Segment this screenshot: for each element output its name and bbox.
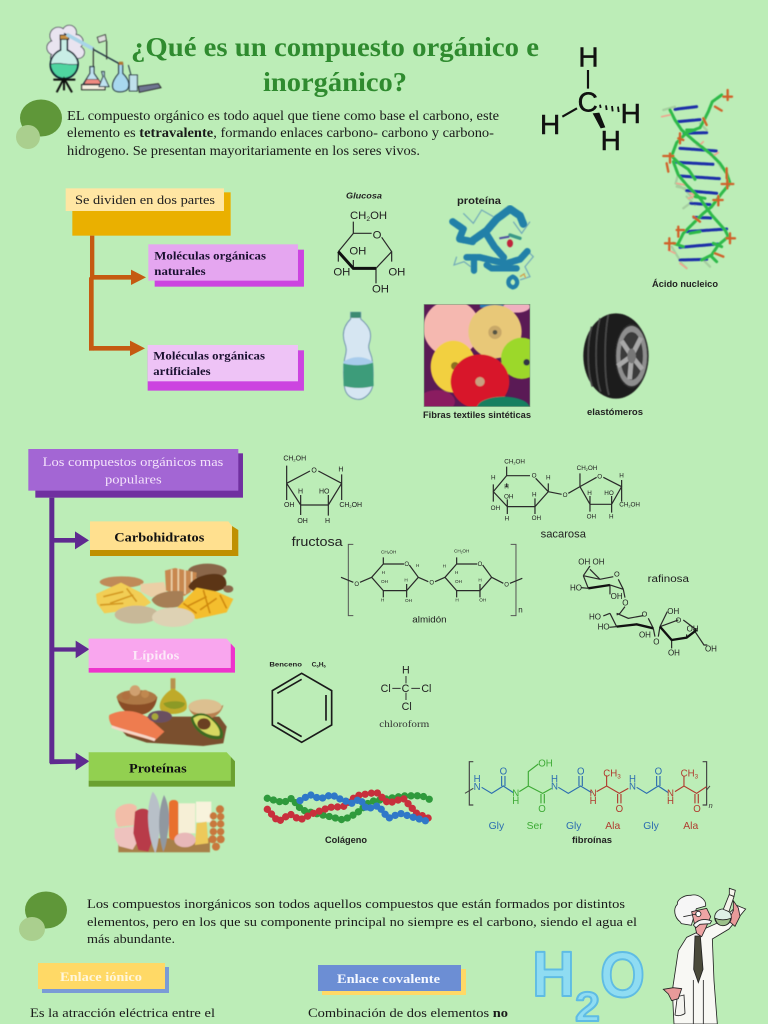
diagram: benceno: 6 xyxy=(324,663,327,668)
diagram: silk fibroin chain: N xyxy=(474,782,481,793)
diagram: almidón: H xyxy=(404,578,408,583)
icon: methane molecule: H xyxy=(540,109,560,140)
text: covalent bond description: Combinación de dos elementos no xyxy=(308,1005,508,1020)
title: inorgánico? xyxy=(263,66,407,97)
icon: H2O bubble letters: H xyxy=(532,938,575,1010)
diagram: almidón: CH xyxy=(381,549,388,554)
diagram: sacarosa: H xyxy=(505,515,510,522)
diagram: glucose: OH xyxy=(372,284,389,296)
caption: Fibras textiles sintéticas: Fibras textiles sintéticas xyxy=(423,410,531,420)
caption: Colágeno: Colágeno xyxy=(325,835,368,845)
box: Enlace iónico xyxy=(38,963,169,993)
diagram: sacarosa: CH xyxy=(619,502,628,509)
photo: protein foods xyxy=(115,792,225,853)
diagram: fructosa: 2 xyxy=(293,457,296,462)
diagram: fructosa: fructosa xyxy=(292,534,343,549)
box: Moléculas orgánicas naturales xyxy=(148,244,304,287)
diagram: glucose: 2 xyxy=(366,216,370,223)
box: Se dividen en dos partes: Se dividen en dos partes xyxy=(75,193,215,207)
icon: decorative circles inorganic xyxy=(19,892,67,941)
diagram: fructosa xyxy=(283,455,362,549)
diagram: rafinosa: O xyxy=(653,637,660,646)
diagram: almidón: O xyxy=(478,562,483,568)
diagram: fructosa: O xyxy=(311,467,317,474)
diagram: fructosa: HO xyxy=(319,489,330,496)
photo: carbohydrate foods xyxy=(96,564,233,627)
diagram: silk fibroin chain: Gly xyxy=(566,821,582,832)
icon: methane molecule: C xyxy=(578,87,598,118)
arrows: orange tree xyxy=(89,236,146,356)
diagram: almidón: n xyxy=(518,606,523,615)
label box: Proteínas: Proteínas xyxy=(129,761,187,776)
diagram: rafinosa: rafinosa xyxy=(648,574,689,585)
diagram: sacarosa: 2 xyxy=(586,468,588,472)
diagram: almidón: almidón xyxy=(412,615,447,625)
diagram: rafinosa: O xyxy=(622,599,629,608)
icon: methane molecule: H xyxy=(601,125,621,156)
diagram: sacarosa: 2 xyxy=(628,505,630,509)
diagram: silk fibroin chain: N xyxy=(629,781,636,792)
diagram: silk fibroin chain: Ala xyxy=(683,821,698,832)
diagram: almidón: H xyxy=(455,570,458,575)
diagram: rafinosa: OH xyxy=(687,625,699,634)
diagram: glucose: Glucosa xyxy=(346,191,382,201)
icon: DNA double helix xyxy=(662,90,735,268)
diagram: rafinosa: HO xyxy=(589,613,601,622)
diagram: almidón: 2 xyxy=(388,551,390,555)
diagram: chloroform xyxy=(379,664,431,730)
diagram: sacarosa: H xyxy=(609,514,614,521)
diagram: silk fibroin chain: 3 xyxy=(695,774,699,781)
text block: organic compound definition: elemento es tetravalente , formando enlaces carbono- carbono y carbono- xyxy=(67,125,494,140)
text block: organic compound definition: hidrogeno. Se presentan mayoritariamente en los seres vivos. xyxy=(67,143,420,158)
diagram: sacarosa: OH xyxy=(587,514,597,521)
diagram: benceno: C xyxy=(312,661,316,668)
label box: Lípidos: Lípidos xyxy=(133,647,179,662)
diagram: glucose: CH xyxy=(350,210,366,222)
diagram: silk fibroin chain: O xyxy=(616,804,624,815)
diagram: glucose: O xyxy=(373,229,382,241)
diagram: sacarosa xyxy=(491,458,640,540)
icon: methane molecule xyxy=(540,42,641,156)
diagram: rafinosa: HO xyxy=(570,584,582,593)
diagram: benceno: 6 xyxy=(316,663,319,668)
diagram: chloroform: H xyxy=(402,664,410,676)
diagram: sacarosa: HO xyxy=(604,490,614,497)
diagram: sacarosa: H xyxy=(619,473,624,480)
diagram: fructosa: H xyxy=(338,467,343,474)
diagram: sacarosa: H xyxy=(504,483,509,490)
diagram: sacarosa: OH xyxy=(532,515,542,522)
diagram: silk fibroin chain: Gly xyxy=(489,821,505,832)
box: Moléculas orgánicas naturales: Moléculas orgánicas xyxy=(154,248,266,262)
box: Los compuestos orgánicos mas populares xyxy=(28,449,243,498)
diagram: sacarosa: O xyxy=(532,473,537,480)
box: Los compuestos orgánicos mas populares: Los compuestos orgánicos mas xyxy=(43,455,223,469)
diagram: rafinosa: OH xyxy=(639,631,651,640)
diagram: glucose: OH xyxy=(349,246,366,258)
diagram: silk fibroin chain: O xyxy=(693,804,701,815)
diagram: glucose: OH xyxy=(370,210,387,222)
diagram: chloroform: Cl xyxy=(421,683,431,695)
diagram: benceno: Benceno xyxy=(269,661,302,668)
diagram: sacarosa: OH xyxy=(630,502,640,509)
diagram: rafinosa: OH xyxy=(668,648,680,657)
diagram: protein ribbon xyxy=(453,209,533,287)
diagram: sacarosa: O xyxy=(597,473,602,480)
photo: rolled synthetic textile fibres xyxy=(424,304,530,407)
caption: Ácido nucleico: Ácido nucleico xyxy=(652,279,719,289)
diagram: silk fibroin chain: H xyxy=(667,796,674,807)
diagram: sacarosa: H xyxy=(587,490,592,497)
box: Se dividen en dos partes xyxy=(66,188,231,236)
diagram: fructosa: OH xyxy=(297,518,308,525)
caption: fibroínas: fibroínas xyxy=(572,835,612,845)
diagram: silk fibroin chain: H xyxy=(512,796,519,807)
photo: lipid foods xyxy=(109,678,227,746)
diagram: rafinosa: OH xyxy=(667,607,680,616)
diagram: almidón: CH xyxy=(454,549,461,554)
diagram: silk fibroin chain: O xyxy=(500,767,508,778)
label box: Lípidos xyxy=(89,639,235,673)
diagram: sacarosa: OH xyxy=(491,505,501,512)
icon: H2O bubble letters xyxy=(532,938,645,1024)
diagram: almidón: OH xyxy=(389,549,396,554)
diagram: almidón xyxy=(341,544,523,625)
icon: plastic bottle xyxy=(343,312,374,399)
diagram: silk fibroin chain: N xyxy=(667,789,674,800)
diagram: silk fibroin chain: Ala xyxy=(605,821,620,832)
icon: decorative circles intro xyxy=(16,100,62,149)
diagram: sacarosa: OH xyxy=(504,494,514,501)
diagram: sacarosa: OH xyxy=(588,465,598,472)
diagram: rafinosa xyxy=(570,557,717,657)
diagram: almidón: H xyxy=(455,597,459,602)
diagram: almidón: H xyxy=(382,570,385,575)
diagram: chloroform: chloroform xyxy=(379,719,430,730)
diagram: almidón: H xyxy=(478,578,482,583)
diagram: rafinosa: O xyxy=(676,615,682,624)
text: ionic bond description: Es la atracción eléctrica entre el xyxy=(30,1005,215,1020)
diagram: sacarosa: 2 xyxy=(513,461,515,465)
diagram: almidón: OH xyxy=(405,598,412,603)
diagram: benceno xyxy=(269,661,332,742)
text block: organic compound definition: EL compuesto orgánico es todo aquel que tiene como base el carbono, este xyxy=(67,108,499,123)
icon: scientist holding flask xyxy=(663,888,746,1024)
diagram: sacarosa: sacarosa xyxy=(541,528,586,540)
icon: methane molecule: H xyxy=(621,98,641,129)
diagram: almidón: 2 xyxy=(461,550,463,554)
diagram: sacarosa: H xyxy=(491,474,496,481)
text block: inorganic compound definition: más abundante. xyxy=(87,931,175,946)
diagram: almidón: H xyxy=(381,597,384,602)
diagram: almidón: OH xyxy=(381,579,388,584)
diagram: fructosa: OH xyxy=(352,502,362,509)
diagram: almidón: O xyxy=(429,581,434,587)
box: Enlace covalente xyxy=(318,965,466,995)
diagram: glucose: OH xyxy=(388,266,405,278)
diagram: silk fibroin chain: H xyxy=(474,774,481,785)
diagram: almidón: H xyxy=(443,564,446,569)
label box: Carbohidratos: Carbohidratos xyxy=(114,530,204,545)
icon: laboratory distillation apparatus xyxy=(47,26,161,92)
label box: Proteínas xyxy=(89,752,235,787)
diagram: glucose: OH xyxy=(333,266,350,278)
box: Moléculas orgánicas artificiales: Moléculas orgánicas xyxy=(153,348,265,362)
diagram: fructosa: CH xyxy=(339,502,349,509)
diagram: fructosa: H xyxy=(325,518,330,525)
diagram: almidón: H xyxy=(416,563,419,568)
diagram: silk fibroin chain: OH xyxy=(538,759,553,770)
diagram: almidón: OH xyxy=(455,579,462,584)
diagram: rafinosa: OH xyxy=(705,644,717,653)
diagram: collagen triple helix xyxy=(267,792,429,822)
diagram: sacarosa: H xyxy=(546,475,551,482)
diagram: almidón: O xyxy=(404,562,409,568)
diagram: silk fibroin chain: CH xyxy=(603,769,617,780)
diagram: silk fibroin chain: n xyxy=(709,801,713,810)
diagram: rafinosa: OH xyxy=(611,592,623,601)
diagram: silk fibroin chain: Ser xyxy=(527,821,543,832)
text block: inorganic compound definition xyxy=(87,896,637,946)
icon: methane molecule: H xyxy=(578,42,599,73)
diagram: silk fibroin chain: O xyxy=(655,767,663,778)
icon: H2O bubble letters: O xyxy=(600,939,645,1011)
text block: inorganic compound definition: elementos, pero en los que su componente principal no siempre es el carbono, siendo el agua el xyxy=(87,914,637,929)
diagram: silk fibroin chain: N xyxy=(512,789,519,800)
diagram: silk fibroin chain: O xyxy=(577,767,585,778)
label box: Carbohidratos xyxy=(90,521,238,556)
diagram: almidón: OH xyxy=(479,597,486,602)
diagram: silk fibroin chain: N xyxy=(551,781,558,792)
diagram: chloroform: Cl xyxy=(402,701,412,713)
caption: elastómeros: elastómeros xyxy=(587,407,643,417)
diagram: benceno: H xyxy=(319,661,324,668)
diagram: silk fibroin chain: Gly xyxy=(643,821,660,832)
text block: inorganic compound definition: Los compuestos inorgánicos son todos aquellos compuestos que están formados por distintos xyxy=(87,896,625,911)
box: Moléculas orgánicas artificiales xyxy=(148,345,304,391)
diagram: silk fibroin chain: O xyxy=(538,804,546,815)
text block: organic compound definition xyxy=(67,108,499,158)
box: Enlace covalente: Enlace covalente xyxy=(337,971,440,986)
diagram: glucose xyxy=(333,191,405,296)
diagram: almidón: O xyxy=(504,583,509,589)
box: Los compuestos orgánicos mas populares: populares xyxy=(105,472,162,486)
diagram: silk fibroin chain: 3 xyxy=(617,774,621,781)
diagram: rafinosa: HO xyxy=(598,623,610,632)
diagram: sacarosa: H xyxy=(532,492,537,499)
title: ¿Qué es un compuesto orgánico e xyxy=(131,31,539,62)
diagram: silk fibroin chain: CH xyxy=(681,769,695,780)
box: Moléculas orgánicas artificiales: artificiales xyxy=(153,364,211,378)
diagram: sacarosa: CH xyxy=(577,465,586,472)
box: Enlace iónico: Enlace iónico xyxy=(60,969,142,984)
diagram: fructosa: CH xyxy=(283,455,293,462)
diagram: rafinosa: OH OH xyxy=(578,557,605,566)
diagram: sacarosa: OH xyxy=(515,458,525,465)
box: Moléculas orgánicas naturales: naturales xyxy=(154,264,206,278)
diagram: chloroform: C xyxy=(402,683,410,695)
diagram: chloroform: Cl xyxy=(381,683,391,695)
arrows: purple tree xyxy=(49,498,89,770)
caption: proteína: proteína xyxy=(457,196,501,207)
diagram: silk fibroin chain xyxy=(465,759,713,832)
diagram: almidón: OH xyxy=(462,549,469,554)
diagram: rafinosa: O xyxy=(614,570,620,579)
diagram: sacarosa: O xyxy=(563,492,568,499)
diagram: silk fibroin chain: H xyxy=(551,774,558,785)
diagram: rafinosa: O xyxy=(642,609,648,618)
diagram: silk fibroin chain: H xyxy=(629,774,636,785)
diagram: fructosa: 2 xyxy=(349,504,352,509)
diagram: silk fibroin chain: N xyxy=(590,789,597,800)
diagram: fructosa: OH xyxy=(284,502,294,509)
diagram: silk fibroin chain: H xyxy=(590,796,597,807)
diagram: almidón: O xyxy=(354,582,359,588)
diagram: fructosa: H xyxy=(298,489,303,496)
diagram: fructosa: OH xyxy=(296,455,306,462)
icon: tire xyxy=(583,313,649,399)
diagram: sacarosa: CH xyxy=(504,458,513,465)
title xyxy=(131,31,539,97)
